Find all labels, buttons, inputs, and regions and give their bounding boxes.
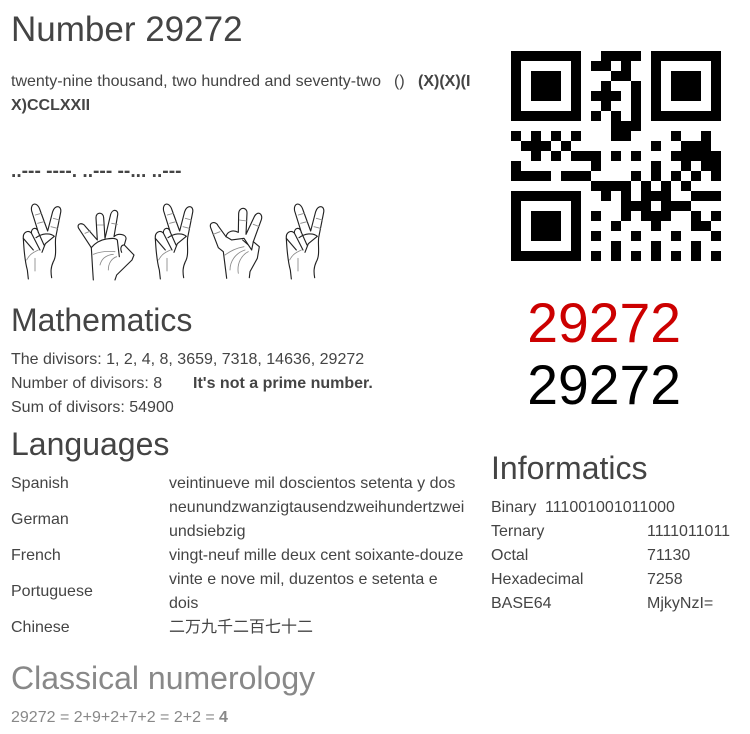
languages table: neunundzwanzigtausendzweihundertzwei: [169, 499, 464, 516]
informatics table: Octal: [491, 547, 528, 564]
heading: mathematics: Mathematics: [11, 302, 192, 338]
informatics table: BASE64: [491, 595, 552, 612]
informatics table: [491, 499, 730, 612]
number in words and roman numeral: (): [394, 73, 405, 90]
icon: hand sign 7: [210, 208, 262, 278]
informatics table: 71130: [647, 547, 690, 564]
morse code: ..--- ----. ..--- --... ..---: [11, 161, 181, 182]
heading: classical numerology: Classical numerology: [11, 660, 315, 696]
heading: informatics: Informatics: [491, 450, 647, 486]
large black number: 29272: [527, 354, 681, 416]
informatics table: MjkyNzI=: [647, 595, 713, 612]
mathematics facts: [11, 351, 373, 416]
icon: hand sign 2: [286, 204, 324, 279]
numerology formula: 4: [219, 709, 228, 726]
mathematics facts: It's not a prime number.: [193, 375, 373, 392]
numerology formula: 29272 = 2+9+2+7+2 = 2+2 =: [11, 709, 215, 726]
languages table: [11, 475, 464, 636]
languages table: Chinese: [11, 619, 70, 636]
informatics table: Ternary: [491, 523, 544, 540]
icon: hand sign 2: [23, 204, 61, 279]
languages table: German: [11, 511, 69, 528]
informatics table: 111001001011000: [545, 499, 675, 516]
icon: hand sign 9: [78, 210, 134, 280]
number in words and roman numeral: [11, 73, 470, 114]
heading: languages: Languages: [11, 426, 169, 462]
sign language hands: [23, 204, 324, 280]
number in words and roman numeral: (X)(X)(I: [418, 73, 470, 90]
number in words and roman numeral: X)CCLXXII: [11, 97, 90, 114]
languages table: French: [11, 547, 61, 564]
mathematics facts: Sum of divisors: 54900: [11, 399, 174, 416]
languages table: Portuguese: [11, 583, 93, 600]
languages table: veintinueve mil doscientos setenta y dos: [169, 475, 455, 492]
mathematics facts: The divisors: 1, 2, 4, 8, 3659, 7318, 14636, 29272: [11, 351, 364, 368]
large red number: 29272: [527, 292, 681, 354]
number in words and roman numeral: twenty-nine thousand, two hundred and seventy-two: [11, 73, 381, 90]
languages table: vingt-neuf mille deux cent soixante-douze: [169, 547, 463, 564]
mathematics facts: Number of divisors: 8: [11, 375, 162, 392]
informatics table: Binary: [491, 499, 536, 516]
QR code: [511, 51, 721, 261]
informatics table: 7258: [647, 571, 683, 588]
languages table: Spanish: [11, 475, 69, 492]
languages table: dois: [169, 595, 198, 612]
icon: hand sign 2: [155, 204, 193, 279]
informatics table: 1111011011: [647, 523, 730, 540]
languages table: vinte e nove mil, duzentos e setenta e: [169, 571, 438, 588]
informatics table: Hexadecimal: [491, 571, 583, 588]
languages table: 二万九千二百七十二: [169, 618, 313, 636]
languages table: undsiebzig: [169, 523, 246, 540]
title: Number 29272: [11, 10, 243, 49]
